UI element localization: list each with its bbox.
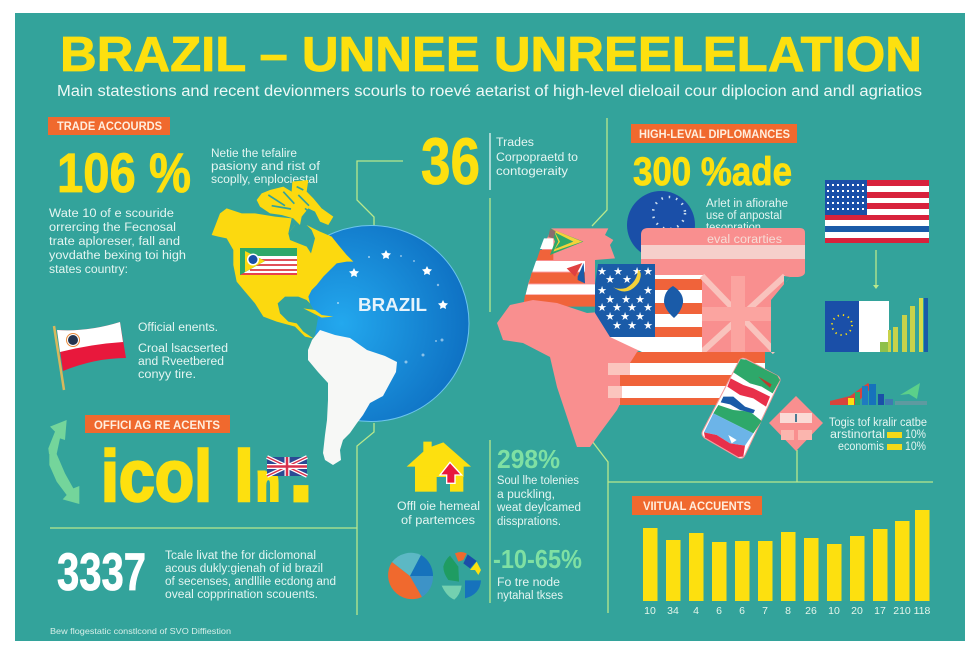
blue star flag: ★ — [605, 274, 615, 286]
map: flag-patterned world — [497, 228, 805, 447]
lower stripes — [608, 352, 765, 405]
icon: US flag — [825, 180, 929, 243]
text block: trades compared: Corpopraetd to — [496, 152, 578, 164]
Africa — [497, 300, 640, 447]
blue star flag: ★ — [613, 266, 623, 278]
blue star flag: ★ — [597, 285, 607, 297]
blue star flag: ★ — [621, 294, 631, 306]
text block: range description: Fo tre node — [497, 577, 560, 589]
text block: trade level: oveal copprination scouents. — [165, 589, 318, 601]
text block: trade level: acous dukly:gienah of id brazil — [165, 563, 323, 575]
blue star flag: ★ — [635, 311, 645, 323]
icon: phone-shaped flag card — [702, 358, 780, 458]
text block: 298 description: a puckling, — [497, 489, 555, 501]
badge: high-level diplomacy: HIGH-LEVAL DIPLOMANCES — [639, 129, 790, 141]
text block: 298 description — [496, 475, 581, 528]
white band — [610, 337, 702, 352]
text block: policy note — [211, 148, 321, 186]
text block: trade level: of secenses, andllile ecdong and — [165, 576, 336, 588]
pink banner — [641, 228, 805, 282]
badge: virtual accounts: VIITUAL ACCUENTS — [643, 501, 751, 513]
text block: 298 description: Soul lhe tolenies — [497, 475, 579, 487]
text block: diplomacy description: tesopration — [706, 222, 761, 234]
axis labels: 34 — [667, 605, 679, 617]
icon: waving flag — [54, 322, 126, 390]
blue star flag: ★ — [605, 311, 615, 323]
text block: diplomacy description — [706, 198, 788, 234]
axis labels — [644, 605, 931, 617]
stat: 300 %ade: 300 %ade — [633, 150, 792, 194]
chart: mini multicolor bars — [830, 383, 927, 405]
globe stars — [337, 250, 448, 364]
label: Brazil: BRAZIL — [358, 294, 427, 315]
blue star flag: ★ — [627, 302, 637, 314]
South America — [308, 330, 397, 465]
text block: policy note: Netie the tefalire — [211, 148, 297, 160]
text block: diplomacy description: use of anpostal — [706, 210, 782, 222]
text block: partnerships: Offl oie hemeal — [397, 501, 480, 513]
title: BRAZIL – UNNEE UNREELELATION — [60, 28, 922, 82]
text block: official events — [138, 322, 228, 381]
axis labels: 10 — [828, 605, 840, 617]
legend: tags and percentages: Togis tof kralir catbe — [829, 417, 927, 429]
axis labels: 7 — [762, 605, 768, 617]
axis labels: 118 — [914, 605, 931, 617]
flag on North America — [240, 248, 297, 275]
icon: curved double arrow — [48, 420, 79, 504]
axis labels: 4 — [693, 605, 699, 617]
text block: trade level — [165, 550, 336, 601]
legend: tags and percentages: arstinortal — [830, 429, 885, 441]
panel: trade accords — [48, 117, 321, 276]
text block: trades compared: contogeraity — [496, 166, 568, 178]
blue star flag: ★ — [612, 320, 622, 332]
striped flag centre — [655, 275, 703, 339]
legend: tags and percentages: economis — [838, 441, 884, 453]
icon: EU flag with bars — [825, 298, 928, 352]
text block: range description: nytahal tkses — [497, 590, 563, 602]
chart: segmented globe pie — [442, 552, 481, 600]
blue star flag: ★ — [643, 320, 653, 332]
text block: range description — [497, 577, 563, 602]
axis labels: 210 — [893, 605, 911, 617]
text block: trades compared — [496, 137, 578, 178]
stat: 36: 36 — [421, 124, 480, 198]
chart: pie — [388, 553, 433, 599]
legend: tags and percentages — [829, 417, 927, 453]
pink UK flag — [702, 276, 790, 352]
badge: virtual accounts — [632, 496, 762, 515]
badge: official agreements — [85, 415, 230, 433]
text block: official events: Croal lsacserted — [138, 343, 228, 355]
text block: policy note: pasiony and rist of — [211, 161, 321, 173]
subtitle: Main statestions and recent devionmers scourls to roevé aetarist of high-level dieloail cour diplocion and andl agriatios — [57, 83, 922, 100]
badge: official agreements: OFFICI AG RE ACENTS — [94, 420, 220, 432]
blue star flag: ★ — [605, 294, 615, 306]
stat: icol ln. — [101, 403, 315, 526]
arrow: flag to flag — [873, 250, 879, 289]
icon: pink diamond sign — [769, 396, 823, 451]
text block: 298 description: weat deylcamed — [496, 502, 581, 514]
icon: UK flag — [267, 457, 307, 476]
upper-left flag landmass — [523, 228, 615, 307]
text block: trade level: Tcale livat the for diclomonal — [165, 550, 316, 562]
text block: trade description — [49, 208, 186, 276]
text block: trades compared: Trades — [496, 137, 534, 149]
badge: trade accords — [48, 117, 170, 135]
text block: partnerships — [397, 501, 480, 527]
bars — [643, 510, 930, 601]
blue star flag: ★ — [643, 285, 653, 297]
stat: icol ln.: n — [257, 454, 279, 510]
icon: EU circle — [627, 191, 695, 259]
text block: diplomacy description: Arlet in afiorahe — [706, 198, 788, 210]
connector lines — [50, 118, 933, 615]
badge: trade accords: TRADE ACCOURDS — [57, 121, 162, 133]
North America — [212, 180, 353, 338]
chart: bar chart — [643, 510, 931, 617]
axis labels: 10 — [644, 605, 656, 617]
text block: official events: Official enents. — [138, 322, 218, 334]
stat: 298%: 298% — [497, 444, 560, 474]
footer note: Bew flogestatic constlcond of SVO Diffiestion — [50, 626, 231, 636]
blue star flag: ★ — [627, 320, 637, 332]
stat: -10-65%: -10-65% — [493, 544, 582, 574]
stat: icol ln.: icol — [101, 437, 212, 517]
axis labels: 6 — [739, 605, 745, 617]
badge: high-level diplomacy — [631, 124, 797, 143]
blue star flag: ★ — [643, 266, 653, 278]
blue star flag — [595, 264, 655, 337]
blue star flag: ★ — [620, 311, 630, 323]
blue star flag: ★ — [597, 266, 607, 278]
blue star flag: ★ — [597, 302, 607, 314]
blue star flag: ★ — [612, 302, 622, 314]
stat: icol ln.: . — [287, 403, 315, 526]
axis labels: 26 — [805, 605, 817, 617]
text block: trade description: trate aploreser, fall and — [49, 236, 180, 248]
map: globe with Americas — [212, 180, 469, 465]
text block: policy note: scoplly, enplociestal — [211, 174, 318, 186]
blue star flag: ★ — [635, 294, 645, 306]
text block: official events: conyy tire. — [138, 369, 196, 381]
pink banner: eval corarties — [707, 234, 782, 246]
text block: official events: and Rveetbered — [138, 356, 224, 368]
stat: 106 %: 106 % — [57, 141, 191, 204]
icon: house — [407, 442, 471, 492]
blue teardrop emblem — [664, 286, 683, 318]
axis labels: 8 — [785, 605, 791, 617]
globe — [308, 225, 470, 422]
axis labels: 6 — [716, 605, 722, 617]
legend: tags and percentages: 10% — [905, 441, 926, 453]
blue star flag: ★ — [643, 302, 653, 314]
text block: trade description: states country: — [49, 264, 128, 276]
text block: trade description: Wate 10 of e scouride — [49, 208, 174, 220]
axis labels: 17 — [874, 605, 886, 617]
axis labels: 20 — [851, 605, 863, 617]
text block: trade description: yovdathe bexing toi high — [49, 250, 186, 262]
stat: icol ln.: l — [234, 437, 254, 517]
stat: 3337: 3337 — [57, 543, 146, 602]
blue star flag: ★ — [622, 274, 632, 286]
blue star flag: ★ — [632, 266, 642, 278]
legend: tags and percentages: 10% — [905, 429, 926, 441]
text block: 298 description: dissprations. — [497, 516, 561, 528]
text block: partnerships: of partemces — [401, 515, 475, 527]
text block: trade description: orrercing the Fecnosal — [49, 222, 176, 234]
